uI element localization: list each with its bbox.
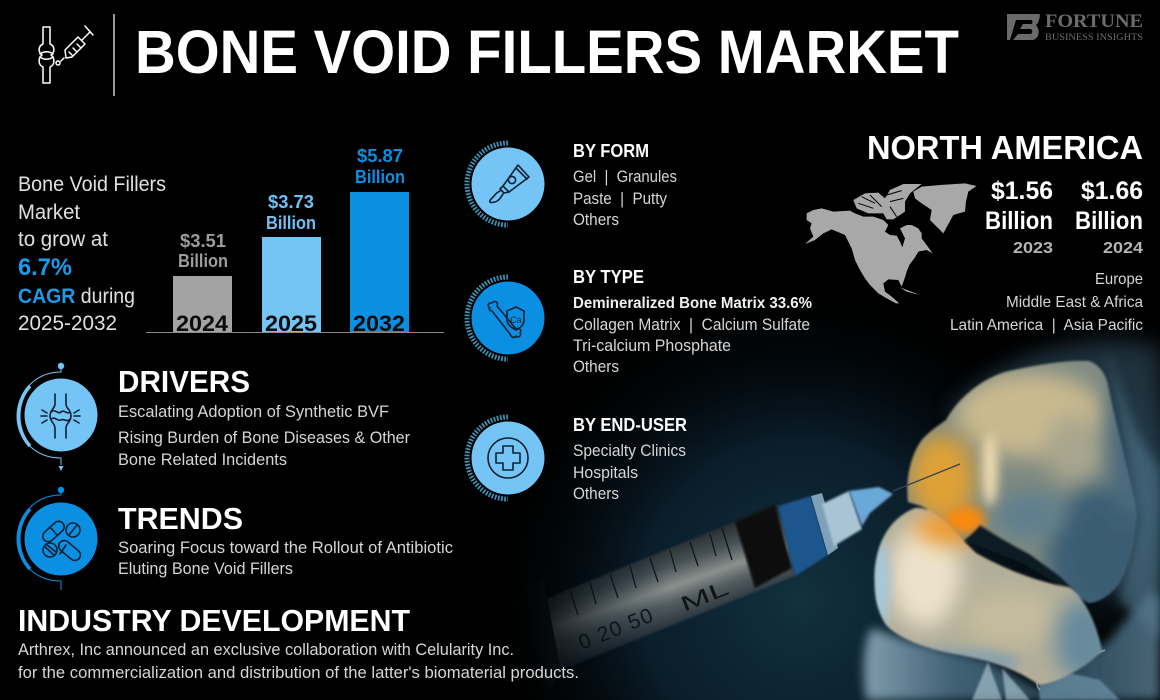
drivers heading: DRIVERS xyxy=(118,364,250,399)
growth statement: Bone Void Fillers xyxy=(18,173,166,196)
growth statement xyxy=(18,173,166,335)
map: north america xyxy=(805,183,977,303)
other regions xyxy=(950,271,1143,334)
regional values xyxy=(985,177,1143,257)
drivers text xyxy=(118,403,410,469)
by end-user segment: Specialty Clinics xyxy=(573,442,686,460)
by end-user segment: BY END-USER xyxy=(573,415,687,435)
by form segment xyxy=(573,141,677,229)
regional values: $1.66 xyxy=(1081,177,1143,205)
growth statement: CAGR during xyxy=(18,285,135,308)
industry development heading: INDUSTRY DEVELOPMENT xyxy=(18,603,410,638)
trends text: Soaring Focus toward the Rollout of Antibiotic xyxy=(118,539,453,557)
other regions: Latin America | Asia Pacific xyxy=(950,317,1143,334)
by end-user segment: Others xyxy=(573,485,619,503)
trends text xyxy=(118,539,453,578)
other regions: Middle East & Africa xyxy=(1006,294,1143,311)
growth statement: 2025-2032 xyxy=(18,312,117,335)
by form segment: Others xyxy=(573,211,619,229)
bar chart: 2025 xyxy=(265,311,317,336)
by end-user segment xyxy=(573,415,687,503)
by end-user segment: Hospitals xyxy=(573,464,638,482)
by type segment: Collagen Matrix | Calcium Sulfate xyxy=(573,316,810,334)
icon: medical cross xyxy=(467,417,544,499)
by type segment: Tri-calcium Phosphate xyxy=(573,337,731,355)
bar chart: Billion xyxy=(266,213,316,233)
bar chart: $5.87 xyxy=(357,146,403,166)
by form segment: BY FORM xyxy=(573,141,649,161)
title: BONE VOID FILLERS MARKET xyxy=(135,18,959,86)
bar chart: 2024 xyxy=(176,311,229,336)
drivers text: Rising Burden of Bone Diseases & Other xyxy=(118,429,410,447)
logo: Fortune Business Insights: BUSINESS INSIGHTS xyxy=(1045,33,1143,43)
industry development text: for the commercialization and distribution of the latter's biomaterial products. xyxy=(18,664,579,682)
logo: Fortune Business Insights xyxy=(1007,11,1143,43)
by form segment: Gel | Granules xyxy=(573,168,677,186)
illustration: syringe: 0 20 50 xyxy=(575,604,656,655)
trends heading: TRENDS xyxy=(118,501,243,536)
by type segment xyxy=(573,267,812,376)
other regions: Europe xyxy=(1095,271,1143,288)
bar chart xyxy=(146,146,444,336)
by type segment: Others xyxy=(573,358,619,376)
icon: pills trends xyxy=(17,487,98,590)
bar chart: Billion xyxy=(355,167,405,187)
drivers text: Escalating Adoption of Synthetic BVF xyxy=(118,403,389,421)
bar chart: Billion xyxy=(178,251,228,271)
regional values: $1.56 xyxy=(991,177,1053,205)
bar chart: $3.73 xyxy=(268,192,314,212)
logo: Fortune Business Insights: FORTUNE xyxy=(1045,11,1143,32)
by type segment: Demineralized Bone Matrix 33.6% xyxy=(573,295,812,312)
growth statement: to grow at xyxy=(18,228,108,251)
illustration: knee joint xyxy=(864,340,1160,700)
regional values: 2024 xyxy=(1103,240,1143,257)
growth statement: 6.7% xyxy=(18,254,72,281)
regional values: 2023 xyxy=(1013,240,1053,257)
illustration: syringe xyxy=(548,463,960,670)
trends text: Eluting Bone Void Fillers xyxy=(118,560,293,578)
industry development text xyxy=(18,641,579,682)
header divider xyxy=(113,14,115,96)
icon: paste tube xyxy=(467,143,544,225)
regional values: Billion xyxy=(1075,207,1143,235)
icon: knee joint drivers xyxy=(17,363,98,471)
drivers text: Bone Related Incidents xyxy=(118,451,287,469)
industry development text: Arthrex, Inc announced an exclusive collaboration with Celularity Inc. xyxy=(18,641,514,659)
header icon: bone and syringe xyxy=(39,26,93,83)
bar chart: 2032 xyxy=(353,311,405,336)
north america heading: NORTH AMERICA xyxy=(867,129,1143,166)
by type segment: BY TYPE xyxy=(573,267,644,287)
growth statement: Market xyxy=(18,201,80,224)
icon: bone and calcium shield: Ca xyxy=(510,315,522,325)
by form segment: Paste | Putty xyxy=(573,190,668,208)
icon: bone and calcium shield xyxy=(467,277,544,359)
bar chart: $3.51 xyxy=(180,231,226,251)
regional values: Billion xyxy=(985,207,1053,235)
illustration: syringe: ML xyxy=(677,577,732,617)
